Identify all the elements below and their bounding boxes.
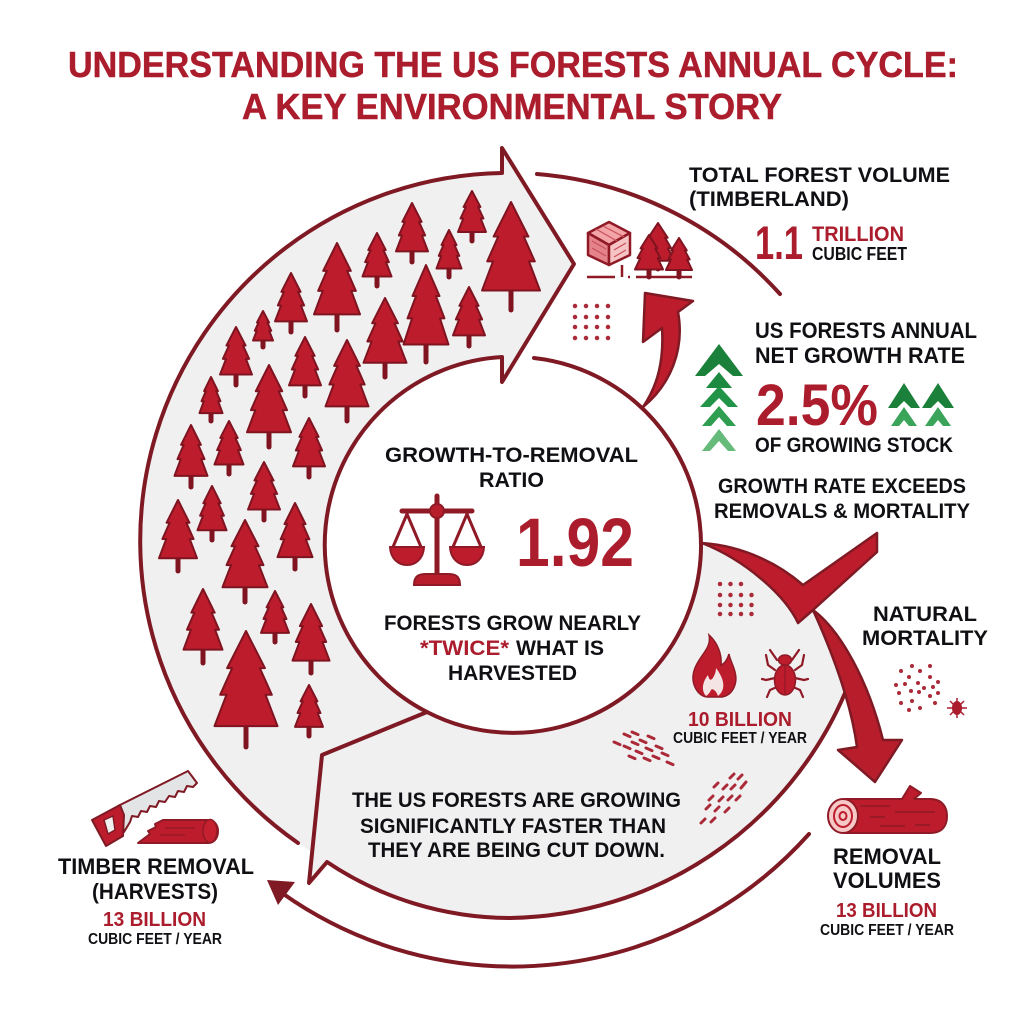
arrow: bottom cycle to timber removal <box>267 834 809 967</box>
decorative dot grid: in band <box>720 584 752 614</box>
text: natural mortality <box>862 602 988 650</box>
text: growth exceeds removals and mortality: GROWTH RATE EXCEEDS <box>718 475 966 498</box>
forest of red trees <box>159 191 540 747</box>
text: total forest volume <box>689 163 950 269</box>
text: natural mortality: MORTALITY <box>862 626 988 650</box>
text: removal volumes <box>820 844 954 939</box>
text: total forest volume: TRILLION <box>812 223 904 246</box>
decorative dashes: left <box>614 732 673 765</box>
text: annual net growth rate: NET GROWTH RATE <box>755 343 965 368</box>
text: annual net growth rate: 2.5% <box>756 373 878 438</box>
text: growth vs cutting statement: THEY ARE BEING CUT DOWN. <box>368 839 665 862</box>
arrow: growth into total volume <box>643 293 693 407</box>
title: A KEY ENVIRONMENTAL STORY <box>242 86 782 127</box>
text: annual net growth rate: OF GROWING STOCK <box>755 434 953 457</box>
icon: small mite <box>947 698 967 718</box>
icon: balance scale <box>390 496 484 585</box>
text: growth vs cutting statement <box>352 789 681 862</box>
text: removal volumes: 13 BILLION <box>836 900 937 922</box>
text: timber removal: 13 BILLION <box>103 909 206 931</box>
text: forests grow nearly twice: HARVESTED <box>448 662 577 685</box>
central circle background <box>325 358 699 732</box>
text: timber removal: TIMBER REMOVAL <box>58 854 254 879</box>
text: forests grow nearly twice: FORESTS GROW NEARLY <box>384 612 641 635</box>
text: annual net growth rate <box>755 318 977 457</box>
panel: removal and mortality band <box>309 543 845 918</box>
text: timber removal: CUBIC FEET / YEAR <box>88 931 222 948</box>
text: 10 billion cubic feet per year: 10 BILLION <box>688 709 792 731</box>
text: total forest volume: TOTAL FOREST VOLUME <box>689 163 950 187</box>
text: forests grow nearly twice <box>384 612 641 685</box>
title: UNDERSTANDING THE US FORESTS ANNUAL CYCLE: <box>68 44 958 85</box>
text: annual net growth rate: US FORESTS ANNUAL <box>755 318 977 343</box>
arrow: large check-shaped flow to removal <box>702 533 902 782</box>
ratio value: 1.92 <box>516 504 634 581</box>
icon: beetle <box>762 650 808 697</box>
text: growth vs cutting statement: THE US FORESTS ARE GROWING <box>352 789 681 812</box>
decorative dot cloud <box>894 664 940 712</box>
text: removal volumes: CUBIC FEET / YEAR <box>820 922 954 939</box>
text: growth exceeds removals and mortality <box>714 475 970 523</box>
text: forests grow nearly twice: WHAT IS <box>516 637 604 660</box>
decorative dashes: right <box>701 774 746 823</box>
panel: growth arrow band with forest <box>140 148 574 852</box>
icon: flame <box>693 635 736 697</box>
icon: log <box>828 786 947 833</box>
icon: tall green chevrons <box>695 344 743 451</box>
text: growth exceeds removals and mortality: REMOVALS & MORTALITY <box>714 500 970 523</box>
text: timber removal <box>58 854 254 948</box>
text: 10 billion cubic feet per year <box>673 709 807 747</box>
icon: small green chevrons <box>888 383 954 426</box>
text: forests grow nearly twice: *TWICE* <box>420 637 510 660</box>
text: removal volumes: REMOVAL <box>833 844 941 869</box>
arc: top right cycle segment <box>537 174 780 294</box>
text: timber removal: (HARVESTS) <box>92 879 218 904</box>
text: natural mortality: NATURAL <box>873 602 977 626</box>
text: total forest volume: 1.1 <box>755 216 803 269</box>
text: growth vs cutting statement: SIGNIFICANTLY FASTER THAN <box>360 815 666 838</box>
text: total forest volume: (TIMBERLAND) <box>689 187 849 211</box>
heading: growth-to-removal ratio: GROWTH-TO-REMOVAL <box>385 444 638 467</box>
heading: growth-to-removal ratio <box>385 444 638 492</box>
text: 10 billion cubic feet per year: CUBIC FEET / YEAR <box>673 730 807 747</box>
heading: growth-to-removal ratio: RATIO <box>479 469 544 492</box>
title <box>68 44 958 127</box>
decorative dot grid: near arrow <box>575 306 618 338</box>
icon: saw and log <box>92 771 218 846</box>
icon: timber cube and trees <box>587 222 692 277</box>
text: total forest volume: CUBIC FEET <box>812 244 907 264</box>
text: removal volumes: VOLUMES <box>833 868 941 893</box>
panel: central ratio circle <box>384 358 701 733</box>
